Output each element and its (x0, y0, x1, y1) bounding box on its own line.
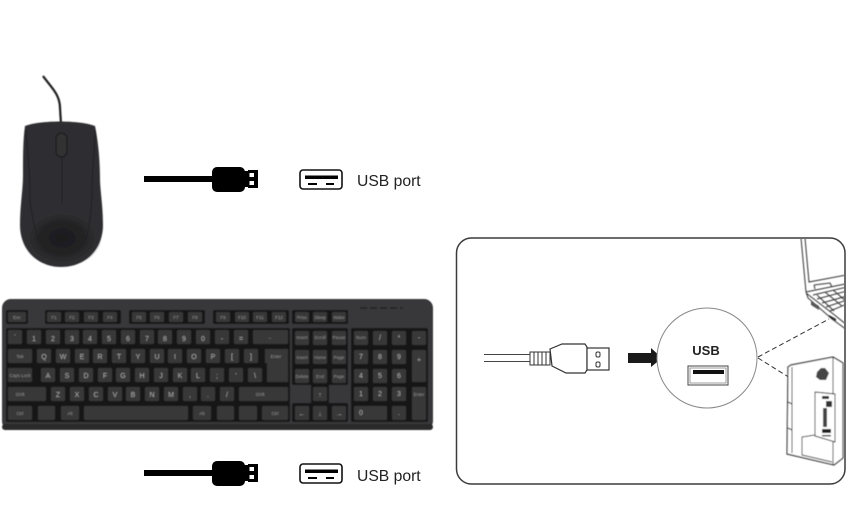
icon: desktop tower (787, 357, 843, 465)
keyboard (2, 299, 433, 430)
key labels small: Num (356, 335, 366, 340)
key labels small: Page (334, 374, 345, 379)
key labels large: Y (136, 354, 141, 361)
key labels large: Z (56, 392, 61, 399)
key labels small: Pause (333, 335, 346, 340)
key labels large: \ (254, 373, 256, 380)
magnified usb circle (657, 308, 757, 408)
key labels small: Esc (13, 315, 21, 320)
key labels large: W (60, 354, 67, 361)
mouse scroll wheel (56, 133, 67, 157)
key labels large: = (239, 336, 243, 343)
mouse body (20, 122, 103, 267)
mouse usb port label: USB port (357, 173, 421, 190)
key labels large: T (117, 354, 122, 361)
key labels large: D (83, 373, 89, 380)
key labels large: O (191, 354, 197, 361)
panel: connection diagram (456, 238, 847, 484)
key labels small: F9 (220, 315, 226, 320)
key labels large: ↓ (318, 411, 322, 418)
key labels small: Enter (271, 354, 282, 359)
key labels large: I (174, 354, 176, 361)
key labels large: X (75, 392, 80, 399)
key labels large: . (398, 410, 400, 417)
qwerty row keys (8, 349, 288, 382)
key labels small (9, 315, 425, 416)
key labels large: 1 (359, 391, 363, 398)
key labels large: 8 (378, 354, 382, 361)
key labels small: Insert (296, 335, 308, 340)
home row keys (8, 368, 262, 382)
key wells (6, 310, 428, 422)
mouse cord (43, 76, 61, 124)
key labels small: F2 (69, 315, 75, 320)
key labels large: F (103, 373, 107, 380)
key labels large: ↑ (318, 392, 322, 399)
key labels small: F10 (238, 315, 246, 320)
keyboard body (2, 299, 433, 430)
key labels large: 0 (359, 410, 363, 417)
key labels small: Sleep (314, 315, 326, 320)
key labels large: 3 (70, 336, 74, 343)
key labels small: Alt (67, 411, 73, 416)
panel frame (456, 238, 845, 484)
key labels large: P (211, 354, 216, 361)
key labels large: E (80, 354, 85, 361)
key labels large: 5 (378, 373, 382, 380)
key labels large: ← (298, 411, 306, 418)
shift row keys (8, 387, 288, 401)
key labels large: L (196, 373, 200, 380)
key labels large: - (418, 335, 421, 342)
key labels small: F12 (275, 315, 283, 320)
key labels large: + (417, 357, 421, 364)
icon: laptop (801, 238, 847, 330)
key labels large: 9 (397, 354, 401, 361)
key labels large: 8 (163, 336, 167, 343)
mouse side seams (26, 130, 95, 240)
key labels small: Tab (16, 354, 24, 359)
key labels small: F6 (154, 315, 160, 320)
key labels small: Insert (296, 355, 308, 360)
mouse usb port icon (300, 170, 342, 189)
key labels large: 9 (182, 336, 186, 343)
key labels small: Caps Lock (9, 373, 31, 378)
key labels large: 4 (359, 373, 363, 380)
bottom row keys (8, 406, 288, 420)
navigation cluster keys (295, 331, 346, 420)
key labels small: Alt (199, 411, 205, 416)
key labels large: 7 (145, 336, 149, 343)
key labels small: F8 (192, 315, 198, 320)
key labels large: 7 (359, 354, 363, 361)
key labels large: 2 (378, 391, 382, 398)
key labels small: Scroll (314, 335, 326, 340)
key labels small: F7 (173, 315, 179, 320)
key labels large: Q (41, 354, 47, 361)
key labels large: 6 (126, 336, 130, 343)
key labels large: V (113, 392, 118, 399)
key labels large: [ (231, 354, 233, 361)
icon: usb cable plug (484, 344, 609, 373)
key labels large: 3 (397, 391, 401, 398)
key labels large: B (131, 392, 136, 399)
number row keys (8, 330, 288, 344)
key labels large: 6 (397, 373, 401, 380)
key labels large: J (159, 373, 163, 380)
key labels large: 4 (88, 336, 92, 343)
usb socket (688, 366, 728, 385)
key labels large: H (139, 373, 145, 380)
key labels small: ← (268, 335, 272, 340)
mouse palm shadow (22, 209, 102, 267)
key labels large: K (178, 373, 183, 380)
key labels large: → (336, 411, 342, 418)
key labels large: . (207, 392, 209, 399)
key labels small: F5 (136, 315, 142, 320)
key labels large: ; (216, 373, 218, 380)
key labels large: S (65, 373, 70, 380)
key labels large: , (189, 392, 191, 399)
key labels small: Ctrl (272, 411, 278, 416)
key labels small: Prtsc (297, 315, 308, 320)
key labels small: Delete (295, 374, 309, 379)
key labels large: / (379, 335, 381, 342)
indicator marks (360, 307, 403, 309)
key labels small: Ctrl (16, 411, 24, 416)
key labels large: - (221, 336, 224, 343)
mouse usb plug (144, 167, 258, 192)
keyboard usb plug (144, 461, 258, 486)
function row keys (8, 312, 346, 322)
dashed connector lines (758, 319, 829, 394)
key labels large: M (168, 392, 174, 399)
key labels small: Shift (15, 392, 25, 397)
key labels large: 0 (201, 336, 205, 343)
key labels large: 2 (51, 336, 55, 343)
key labels small: Home (314, 355, 326, 360)
key labels large: A (46, 373, 51, 380)
key labels large: 1 (32, 336, 36, 343)
numeric keypad keys (354, 331, 426, 420)
key labels large: C (93, 392, 99, 399)
key labels small: F1 (51, 315, 57, 320)
key labels large: * (398, 335, 401, 342)
arrow (628, 348, 662, 367)
key labels small: F11 (256, 315, 264, 320)
key labels large: / (226, 392, 228, 399)
key labels small: Page (334, 355, 345, 360)
key labels large: ` (14, 335, 16, 342)
key labels small: F3 (88, 315, 94, 320)
key labels large: R (97, 354, 103, 361)
keyboard usb port label: USB port (357, 468, 421, 485)
usb heading: USB (692, 343, 720, 358)
key labels large: U (154, 354, 160, 361)
key labels small: Wake (333, 315, 345, 320)
mouse (20, 76, 103, 267)
key labels large (14, 335, 421, 418)
key labels small: Enter (414, 392, 425, 397)
key labels small: F4 (107, 315, 113, 320)
key labels large: ' (235, 373, 237, 380)
key labels large: N (149, 392, 155, 399)
key labels small: End (316, 374, 324, 379)
keyboard usb port icon (300, 464, 342, 483)
key labels large: G (120, 373, 126, 380)
key labels large: ] (250, 354, 252, 361)
key labels large: 5 (107, 336, 111, 343)
key labels small: Shift (255, 392, 265, 397)
